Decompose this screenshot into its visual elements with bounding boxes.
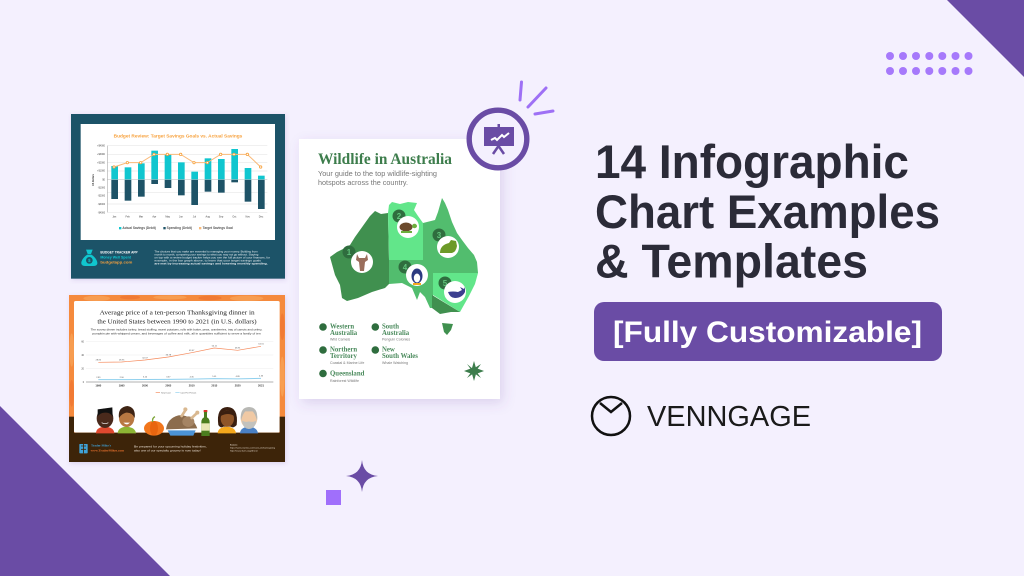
budget chart legend	[119, 226, 233, 230]
legend: Northern Territory: Coastal & Marine Life	[330, 361, 364, 365]
subtitle pill: [Fully Customizable]	[613, 316, 922, 349]
main heading: & Templates	[595, 234, 868, 288]
Thanksgiving footer message: Be prepared for your upcoming holiday festivities,	[134, 444, 207, 448]
Venngage logo: VENNGAGE	[647, 401, 811, 433]
budget chart legend: Target Savings Goal	[203, 226, 233, 230]
Thanksgiving line chart: 2000	[142, 383, 148, 387]
Thanksgiving line chart: 4.89	[236, 376, 241, 378]
region: Tasmania	[442, 323, 453, 335]
legend: South Australia: Australia	[382, 330, 410, 337]
legend: Queensland: Rainforest Wildlife	[330, 379, 359, 383]
marker 4: penguin	[398, 260, 428, 286]
budget chart legend: Actual Savings (Debit)	[122, 226, 156, 230]
Thanksgiving footer sources	[230, 445, 275, 453]
Thanksgiving chart legend: Total Cost	[161, 391, 171, 394]
Thanksgiving line chart: 48.91	[235, 348, 241, 350]
budget bar chart: -$3000	[98, 204, 106, 206]
budget bar chart: Apr	[152, 216, 156, 219]
wildlife title: Wildlife in Australia	[318, 151, 452, 168]
illustration: wine bottle	[201, 410, 210, 436]
Thanksgiving line chart: 2.90	[120, 377, 125, 379]
Thanksgiving line chart: 50.11	[212, 345, 218, 347]
budget footer paragraph: example, in the bar graph above, to learn that your target savings goals	[154, 258, 262, 262]
illustration: pumpkin	[144, 417, 164, 436]
budget bar chart: May	[165, 216, 171, 219]
marker 5: whale	[438, 276, 466, 303]
icon: money bag: $	[88, 258, 91, 263]
marker 2: turtle	[392, 210, 419, 238]
budget bar chart: US Dollars	[93, 173, 95, 186]
bottom-left corner triangle	[0, 406, 170, 576]
legend: Queensland: Queensland	[330, 370, 365, 378]
Thanksgiving line chart: 3.24	[143, 377, 148, 379]
Thanksgiving chart description: pumpkin pie with whipped cream, and beverages of coffee and milk, all in quantities sufficient to serve a family of ten	[92, 332, 261, 336]
budget bar chart: +$2000	[97, 162, 106, 164]
Thanksgiving line chart: 36.78	[166, 354, 172, 356]
icon: money bag	[81, 250, 97, 266]
Thanksgiving line chart: 4.35	[190, 376, 195, 378]
illustration: roast turkey on dish	[166, 407, 199, 436]
Thanksgiving footer sources: Sources:	[230, 445, 238, 447]
illustration: person one	[96, 407, 114, 433]
Thanksgiving line chart: 0	[83, 382, 85, 384]
Thanksgiving line chart	[81, 342, 273, 387]
budget footer brand: Money Well Spent	[100, 256, 132, 260]
icon: store logo	[79, 444, 88, 453]
main heading	[595, 135, 940, 288]
Thanksgiving line chart: 5.33	[259, 376, 264, 378]
top-right corner triangle	[947, 0, 1024, 77]
legend: Queensland	[319, 370, 365, 383]
budget footer paragraph: The choices that you make are essential to managing your money. Building from	[154, 249, 259, 253]
Thanksgiving footer sources: https://www.statista.com/cost-of-thanksgiving	[230, 447, 275, 450]
budget footer brand: budgetapp.com	[100, 261, 133, 265]
budget footer paragraph	[154, 249, 270, 266]
budget bar chart: Jan	[112, 216, 117, 219]
legend: South Australia	[372, 323, 410, 342]
budget bar chart: Aug	[205, 216, 210, 219]
marker 1: camel	[342, 246, 373, 273]
panel: Thanksgiving dinner card	[69, 295, 285, 462]
main heading: 14 Infographic	[595, 135, 909, 188]
illustration: person four	[240, 407, 258, 433]
wildlife subtitle	[318, 169, 437, 187]
budget footer paragraph: month to month, comparing your savings to what you may not go without. Staying	[154, 252, 259, 256]
legend: New South Wales: South Wales	[382, 353, 418, 360]
Thanksgiving chart description: The survey dinner includes turkey, bread stuffing, sweet potatoes, rolls with butter, peas, cranberries, tray of carrots and celery,	[91, 327, 263, 331]
region: New South Wales	[433, 273, 478, 312]
Thanksgiving line chart: 40	[81, 355, 85, 357]
marker 3: frog: 3	[437, 231, 442, 240]
icon: presentation chart badge	[469, 110, 527, 168]
Thanksgiving chart title	[97, 310, 257, 326]
region: South Australia	[389, 260, 433, 308]
Thanksgiving chart title: the United States between 1990 to 2021 (in U.S. dollars)	[97, 319, 257, 326]
Thanksgiving footer sources: http://www.farm.org/dinner	[230, 450, 259, 453]
illustration: person three	[218, 407, 237, 433]
Thanksgiving line chart: 43.47	[189, 350, 195, 352]
legend: Western Australia: Wild Camels	[330, 338, 350, 342]
legend: Western Australia: Western	[330, 324, 354, 330]
budget bar chart: Dec	[259, 216, 264, 219]
budget bar chart: +$4000	[97, 146, 106, 148]
budget bar chart	[93, 146, 267, 219]
budget bar chart: Nov	[245, 216, 251, 219]
legend: Northern Territory: Territory	[330, 353, 358, 360]
budget bar chart: Oct	[232, 216, 237, 219]
Thanksgiving chart legend: Cost Per Person	[180, 391, 197, 394]
Thanksgiving line chart: 60	[81, 342, 85, 344]
marker 2: turtle: 2	[397, 212, 402, 221]
legend: Western Australia: Australia	[330, 330, 358, 337]
Thanksgiving line chart: 2.89	[96, 377, 101, 379]
Thanksgiving line chart: 2021	[258, 383, 264, 387]
Thanksgiving line chart: 53.31	[258, 344, 264, 346]
marker 1: camel: 1	[347, 248, 352, 257]
Thanksgiving line chart: 2015	[211, 383, 218, 387]
budget footer paragraph: are met by increasing actual savings and lowering monthly spending.	[154, 262, 268, 266]
Thanksgiving line chart: 2020	[235, 383, 241, 387]
Thanksgiving line chart: 2005	[165, 383, 172, 387]
panel: budget chart card	[71, 114, 285, 279]
budget bar chart: -$4000	[98, 212, 106, 214]
Thanksgiving line chart: 32.37	[142, 357, 148, 359]
marker 5: whale: 5	[443, 279, 448, 288]
map of Australia	[330, 198, 478, 335]
Thanksgiving chart title: Average price of a ten-person Thanksgiving dinner in	[100, 310, 255, 317]
budget bar chart: Jul	[193, 216, 196, 219]
legend: South Australia: Penguin Colonies	[382, 338, 410, 342]
wildlife subtitle: Your guide to the top wildlife-sighting	[318, 169, 437, 178]
subtitle pill	[594, 302, 942, 361]
region: Western Australia	[330, 211, 389, 301]
budget bar chart: +$3000	[97, 154, 106, 156]
main heading: Chart Examples	[595, 185, 940, 238]
legend: Northern Territory	[319, 346, 364, 365]
budget chart title: Budget Review: Target Savings Goals vs. Actual Savings	[114, 133, 243, 139]
Thanksgiving chart legend	[156, 391, 197, 394]
Thanksgiving line chart: 5.01	[212, 376, 217, 378]
marker 4: penguin: 4	[403, 263, 408, 272]
legend: Western Australia	[319, 323, 358, 342]
accent rays	[520, 82, 553, 114]
budget bar chart: Jun	[179, 216, 184, 219]
marker 3: frog	[432, 228, 459, 258]
Thanksgiving line chart: 28.95	[119, 359, 125, 361]
Thanksgiving footer brand: Trader Mike's	[91, 444, 112, 448]
four-point star decoration	[346, 460, 378, 492]
budget bar chart: -$2000	[98, 196, 106, 198]
legend: New South Wales: Whale Watching	[382, 361, 408, 365]
Venngage logo	[592, 397, 811, 435]
wildlife subtitle: hotspots across the country.	[318, 178, 408, 187]
icon: compass rose	[464, 361, 484, 381]
purple square decoration	[326, 490, 341, 505]
region: Queensland	[423, 198, 478, 273]
Thanksgiving footer brand	[91, 444, 125, 453]
Thanksgiving line chart: 1990	[95, 383, 102, 387]
Thanksgiving line chart: 3.67	[166, 377, 171, 379]
budget bar chart: Sep	[219, 216, 224, 219]
budget bar chart: -$1000	[98, 188, 106, 190]
budget bar chart: Mar	[139, 216, 143, 219]
dot grid decoration	[886, 52, 972, 75]
Thanksgiving line chart: 2010	[189, 383, 195, 387]
budget footer paragraph: on top with a review budget tracker helps you see the full picture of your finances, for	[154, 255, 270, 259]
Thanksgiving footer message: also one of our specialty grocery is now today!	[134, 449, 201, 453]
map legend	[319, 323, 418, 383]
budget bar chart: Feb	[126, 216, 130, 219]
budget footer brand	[100, 250, 138, 265]
panel: Wildlife in Australia card	[299, 139, 500, 399]
budget bar chart: +$1000	[97, 171, 106, 173]
budget bar chart: $0	[102, 180, 106, 182]
legend: New South Wales: New	[382, 346, 395, 354]
region: Victoria	[432, 295, 460, 314]
Thanksgiving chart description	[91, 327, 263, 336]
Thanksgiving line chart: 1995	[119, 383, 125, 387]
Thanksgiving footer brand: www.TraderMikes.com	[91, 449, 125, 453]
budget chart legend: Spending (Debit)	[167, 226, 192, 230]
Thanksgiving line chart: 20	[81, 368, 85, 370]
region: Northern Territory	[388, 202, 423, 260]
legend: New South Wales	[372, 346, 418, 365]
legend: South Australia: South	[382, 324, 399, 330]
budget footer brand: BUDGET TRACKER APP	[100, 250, 138, 254]
Thanksgiving line chart: 28.85	[96, 360, 102, 362]
Thanksgiving footer message	[134, 444, 207, 453]
illustration: person two	[118, 406, 136, 433]
legend: Northern Territory: Northern	[330, 346, 357, 354]
